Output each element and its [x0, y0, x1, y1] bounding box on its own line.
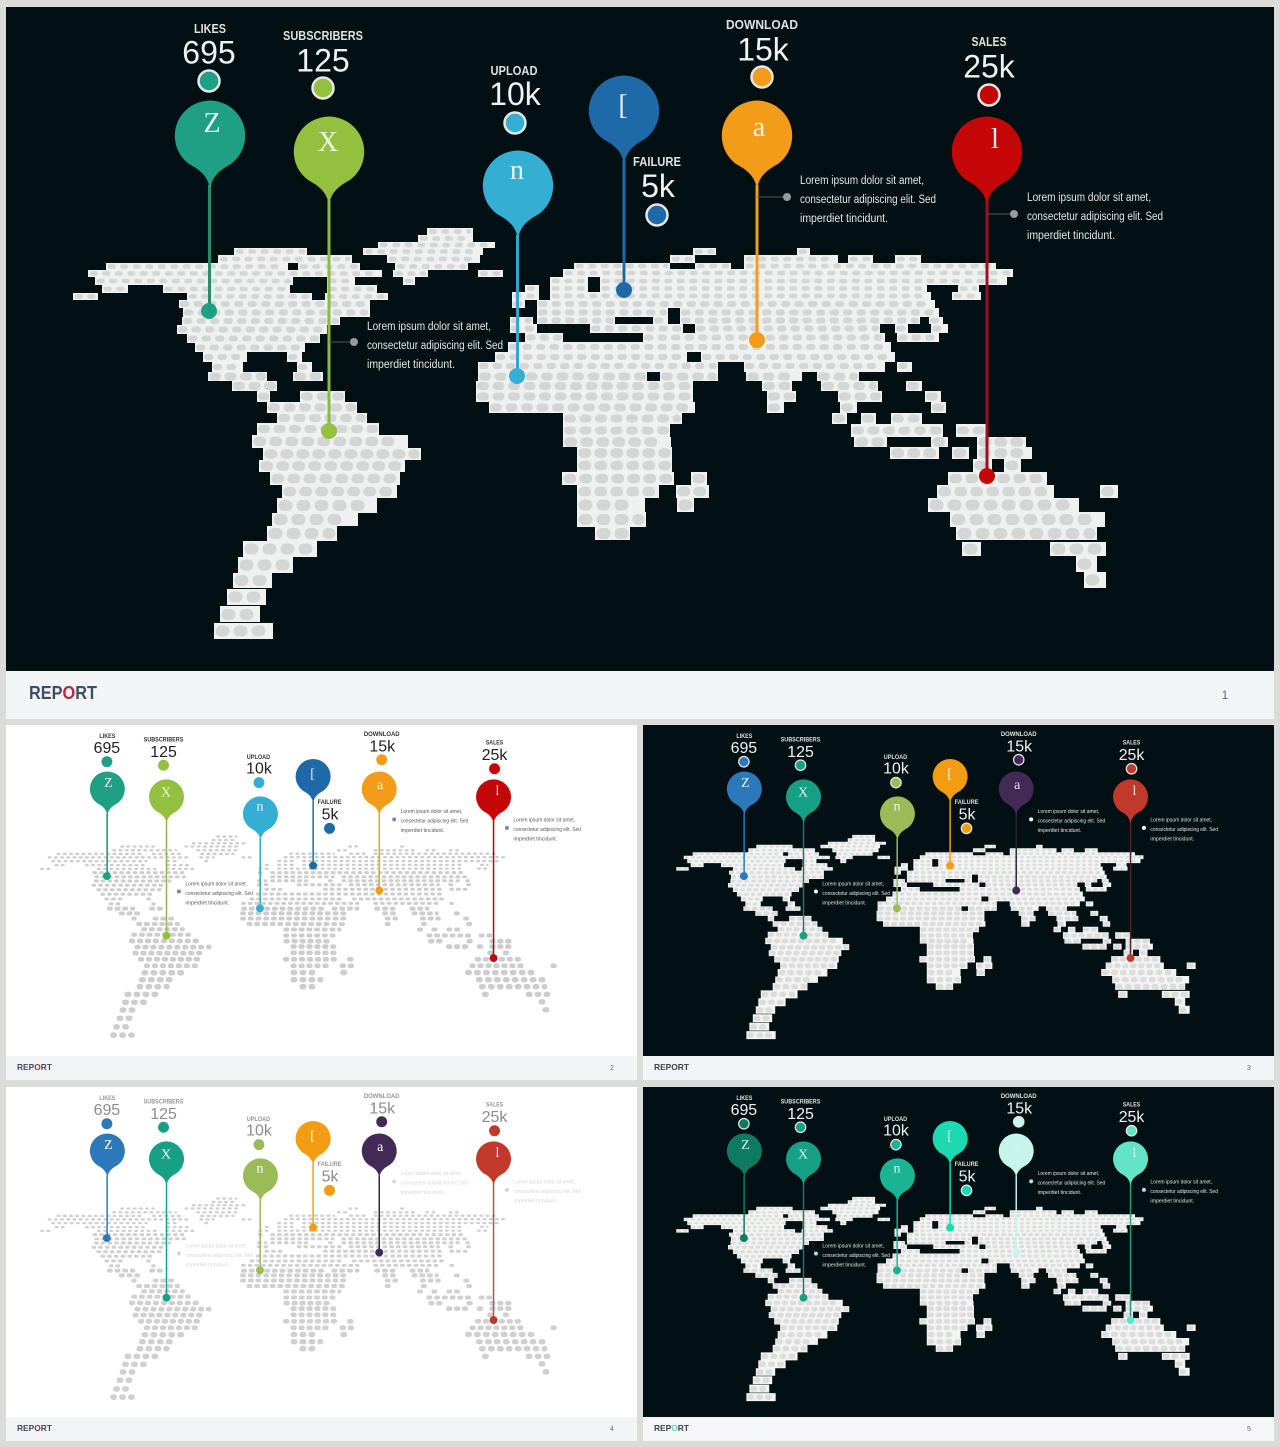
- label: likes 695: LIKES: [99, 1095, 115, 1102]
- pin: l red: l: [496, 1146, 500, 1161]
- label: sales 25k: SALES: [972, 35, 1006, 49]
- pin: l red: [952, 117, 1022, 484]
- pin: bracket orange: [: [310, 1129, 315, 1144]
- world map dots: [41, 1199, 556, 1397]
- label: failure 5k: 5k: [641, 168, 676, 204]
- pin: bracket blue: [: [310, 767, 315, 782]
- callout: americas: [329, 321, 503, 371]
- callout: oceania: Lorem ipsum dolor sit amet,: [513, 817, 575, 823]
- callout: asia: imperdiet tincidunt.: [401, 828, 445, 834]
- label: sales 25k: [1119, 1101, 1144, 1136]
- panel: thumbnail 5 dark slide teal: [643, 1087, 1274, 1417]
- label: upload 10k: [246, 1116, 272, 1150]
- callout: americas: [177, 1244, 253, 1268]
- label: failure 5k: [318, 799, 341, 834]
- label: sales 25k: 25k: [963, 48, 1016, 84]
- callout: americas: Lorem ipsum dolor sit amet,: [185, 1244, 247, 1250]
- callout: americas: Lorem ipsum dolor sit amet,: [822, 1244, 884, 1250]
- pin: Z dark teal: [727, 1133, 762, 1242]
- label: likes 695: 695: [731, 740, 757, 757]
- label: likes 695: LIKES: [736, 1095, 752, 1102]
- callout: asia: [757, 175, 936, 225]
- label: download 15k: 15k: [737, 32, 790, 68]
- label: sales 25k: SALES: [486, 739, 503, 746]
- label: upload 10k: [246, 754, 272, 788]
- label: sales 25k: SALES: [486, 1101, 503, 1108]
- pin: a pale mint: [999, 1133, 1034, 1256]
- footer: thumbnail 3: 3: [1247, 1065, 1251, 1072]
- label: subscribers 125: 125: [787, 1106, 814, 1123]
- label: likes 695: LIKES: [99, 733, 115, 740]
- callout: asia: [392, 1171, 468, 1196]
- pin: bracket blue: [296, 759, 331, 870]
- label: failure 5k: FAILURE: [318, 799, 341, 806]
- callout: asia: consectetur adipiscing elit. Sed: [800, 194, 936, 206]
- pin: Z green: [175, 101, 245, 319]
- pin: Z blue: [90, 1133, 125, 1242]
- label: download 15k: DOWNLOAD: [1001, 731, 1037, 738]
- pin: Z blue: [727, 771, 762, 880]
- footer: main slide: 1: [1222, 688, 1229, 702]
- panel: thumbnail 3 dark slide: [643, 725, 1274, 1056]
- callout: oceania: consectetur adipiscing elit. Sed: [1150, 827, 1218, 833]
- pin: n olive: [880, 796, 915, 912]
- pin: bracket blue: [589, 76, 659, 298]
- label: upload 10k: UPLOAD: [884, 754, 908, 761]
- pin: X lime: X: [318, 127, 338, 158]
- label: likes 695: [94, 733, 120, 767]
- pin: Z blue: Z: [741, 776, 750, 791]
- world map dots: [41, 837, 556, 1035]
- callout: oceania: [505, 1179, 581, 1204]
- callout: oceania: Lorem ipsum dolor sit amet,: [1150, 817, 1212, 823]
- pin: bracket orange: [296, 1121, 331, 1232]
- label: sales 25k: [1119, 739, 1144, 774]
- pin: l red: [476, 779, 511, 962]
- pin: a orange: [722, 101, 792, 348]
- footer: thumbnail 5: [643, 1417, 1274, 1441]
- label: download 15k: 15k: [369, 1101, 395, 1118]
- pin: a purple: a: [377, 1140, 383, 1155]
- label: upload 10k: UPLOAD: [490, 64, 538, 78]
- panel: thumbnail 4 white slide: [6, 1087, 637, 1417]
- label: likes 695: [94, 1095, 120, 1129]
- pin: n olive: n: [893, 799, 900, 814]
- label: upload 10k: 10k: [246, 761, 272, 778]
- callout: oceania: imperdiet tincidunt.: [513, 1198, 558, 1204]
- pin: a orange: a: [377, 778, 383, 793]
- callout: americas: imperdiet tincidunt.: [185, 900, 230, 906]
- label: download 15k: [726, 18, 798, 88]
- label: likes 695: [182, 22, 236, 92]
- callout: oceania: imperdiet tincidunt.: [513, 836, 558, 842]
- footer: thumbnail 2: 2: [610, 1065, 614, 1072]
- callout: asia: imperdiet tincidunt.: [800, 213, 888, 225]
- label: subscribers 125: SUBSCRIBERS: [781, 1098, 820, 1105]
- callout: oceania: consectetur adipiscing elit. Sed: [1150, 1189, 1218, 1195]
- label: likes 695: [731, 1095, 757, 1129]
- callout: oceania: consectetur adipiscing elit. Sed: [513, 1189, 581, 1195]
- callout: oceania: [1142, 817, 1218, 842]
- pin: n green teal: n: [893, 1161, 900, 1176]
- pin: bracket orange: [933, 759, 968, 870]
- callout: americas: imperdiet tincidunt.: [822, 1262, 867, 1268]
- label: subscribers 125: SUBSCRIBERS: [283, 29, 363, 43]
- callout: oceania: consectetur adipiscing elit. Sed: [1027, 211, 1163, 223]
- callout: oceania: [1142, 1179, 1218, 1204]
- pin: X teal: X: [798, 786, 808, 801]
- pin: X teal: X: [161, 1148, 171, 1163]
- footer: thumbnail 3: [643, 1056, 1274, 1080]
- label: download 15k: DOWNLOAD: [1001, 1093, 1037, 1100]
- pin: l red: l: [496, 784, 500, 799]
- callout: americas: imperdiet tincidunt.: [822, 900, 867, 906]
- label: upload 10k: 10k: [883, 761, 909, 778]
- callout: oceania: [505, 817, 581, 842]
- pin: bracket bright teal: [933, 1121, 968, 1232]
- footer: thumbnail 2: [6, 1056, 637, 1080]
- label: likes 695: LIKES: [736, 733, 752, 740]
- label: likes 695: 695: [182, 34, 236, 70]
- callout: americas: consectetur adipiscing elit. Sed: [185, 891, 253, 897]
- footer: thumbnail 4: [6, 1417, 637, 1441]
- footer: thumbnail 4: REPORT: [17, 1423, 53, 1433]
- pin: l mint: [1113, 1141, 1148, 1324]
- label: failure 5k: FAILURE: [318, 1161, 341, 1168]
- callout: americas: consectetur adipiscing elit. Sed: [822, 891, 890, 897]
- pin: n cyan: n: [510, 155, 524, 186]
- callout: asia: imperdiet tincidunt.: [1038, 828, 1082, 834]
- label: likes 695: LIKES: [194, 22, 226, 36]
- pin: Z green: Z: [104, 776, 113, 791]
- callout: americas: Lorem ipsum dolor sit amet,: [367, 321, 491, 333]
- label: download 15k: [1001, 1093, 1037, 1127]
- label: subscribers 125: SUBSCRIBERS: [781, 736, 820, 743]
- label: likes 695: 695: [94, 740, 120, 757]
- label: sales 25k: SALES: [1123, 739, 1140, 746]
- world map: [676, 835, 1196, 1039]
- label: upload 10k: 10k: [246, 1123, 272, 1140]
- pin: n green teal: [880, 1158, 915, 1274]
- label: likes 695: [731, 733, 757, 767]
- label: failure 5k: 5k: [322, 806, 338, 823]
- callout: americas: Lorem ipsum dolor sit amet,: [822, 882, 884, 888]
- pin: X lime: X: [161, 786, 171, 801]
- pin: X lime: [149, 779, 184, 940]
- label: failure 5k: FAILURE: [955, 1161, 978, 1168]
- footer: main slide: [6, 671, 1274, 719]
- callout: oceania: imperdiet tincidunt.: [1027, 230, 1115, 242]
- pin: Z green: [90, 771, 125, 880]
- label: subscribers 125: [144, 736, 183, 771]
- label: sales 25k: [482, 1101, 507, 1136]
- pin: Z blue: Z: [104, 1138, 113, 1153]
- label: upload 10k: [883, 1116, 909, 1150]
- callout: americas: imperdiet tincidunt.: [367, 359, 455, 371]
- pin: l red: l: [991, 124, 999, 155]
- label: subscribers 125: 125: [787, 744, 814, 761]
- panel: thumbnail 2 white slide: [6, 725, 637, 1056]
- label: likes 695: 695: [94, 1102, 120, 1119]
- callout: asia: [1029, 1171, 1105, 1196]
- label: upload 10k: 10k: [883, 1123, 909, 1140]
- pin: a purple: [362, 1133, 397, 1256]
- label: subscribers 125: [283, 29, 363, 98]
- pin: a purple: [999, 771, 1034, 894]
- label: subscribers 125: 125: [150, 1106, 177, 1123]
- world map: [73, 228, 1118, 639]
- callout: asia: consectetur adipiscing elit. Sed: [401, 1180, 468, 1186]
- label: sales 25k: 25k: [482, 1109, 507, 1126]
- panel: main dark slide: [6, 7, 1274, 671]
- pin: n olive: n: [256, 1161, 263, 1176]
- label: download 15k: DOWNLOAD: [364, 731, 400, 738]
- callout: americas: [177, 882, 253, 906]
- pin: n cyan: [243, 796, 278, 912]
- footer: thumbnail 3: REPORT: [654, 1062, 690, 1072]
- callout: americas: Lorem ipsum dolor sit amet,: [185, 882, 247, 888]
- pin: n cyan: [483, 151, 553, 384]
- callout: americas: [814, 882, 890, 906]
- callout: oceania: consectetur adipiscing elit. Sed: [513, 827, 581, 833]
- label: download 15k: [1001, 731, 1037, 765]
- callout: oceania: imperdiet tincidunt.: [1150, 836, 1195, 842]
- label: subscribers 125: SUBSCRIBERS: [144, 1098, 183, 1105]
- callout: asia: Lorem ipsum dolor sit amet,: [401, 1171, 463, 1177]
- label: subscribers 125: [144, 1098, 183, 1133]
- label: sales 25k: SALES: [1123, 1101, 1140, 1108]
- label: likes 695: 695: [731, 1102, 757, 1119]
- pin: n cyan: n: [256, 799, 263, 814]
- footer: thumbnail 2: REPORT: [17, 1062, 53, 1072]
- label: download 15k: 15k: [369, 739, 395, 756]
- callout: americas: consectetur adipiscing elit. Sed: [822, 1253, 890, 1259]
- label: failure 5k: [633, 155, 681, 226]
- label: download 15k: 15k: [1006, 1101, 1032, 1118]
- callout: oceania: Lorem ipsum dolor sit amet,: [1027, 192, 1151, 204]
- label: subscribers 125: [781, 1098, 820, 1132]
- callout: americas: consectetur adipiscing elit. Sed: [185, 1253, 253, 1259]
- pin: bracket orange: [: [947, 767, 952, 782]
- label: sales 25k: [963, 35, 1016, 106]
- label: download 15k: [364, 731, 400, 765]
- callout: asia: Lorem ipsum dolor sit amet,: [1038, 809, 1100, 815]
- label: upload 10k: UPLOAD: [247, 1116, 271, 1123]
- label: sales 25k: 25k: [482, 747, 507, 764]
- callout: americas: consectetur adipiscing elit. Sed: [367, 340, 503, 352]
- pin: a purple: a: [1014, 778, 1020, 793]
- callout: asia: Lorem ipsum dolor sit amet,: [800, 175, 924, 187]
- pin: Z green: Z: [203, 108, 221, 139]
- callout: asia: Lorem ipsum dolor sit amet,: [401, 809, 463, 815]
- callout: oceania: Lorem ipsum dolor sit amet,: [1150, 1179, 1212, 1185]
- pin: l mint: l: [1133, 1146, 1137, 1161]
- pin: Z dark teal: Z: [741, 1138, 750, 1153]
- pin: a pale mint: a: [1014, 1140, 1020, 1155]
- label: upload 10k: UPLOAD: [884, 1116, 908, 1123]
- label: failure 5k: FAILURE: [955, 799, 978, 806]
- label: failure 5k: 5k: [959, 806, 975, 823]
- label: upload 10k: [489, 64, 542, 134]
- label: upload 10k: [883, 754, 909, 788]
- pin: l red: [476, 1141, 511, 1324]
- label: download 15k: 15k: [1006, 739, 1032, 756]
- label: failure 5k: [955, 799, 978, 834]
- pin: a orange: a: [753, 112, 766, 143]
- pin: X teal: [149, 1141, 184, 1302]
- label: failure 5k: [318, 1161, 341, 1196]
- label: failure 5k: 5k: [959, 1168, 975, 1185]
- label: subscribers 125: 125: [150, 744, 177, 761]
- label: sales 25k: [482, 739, 507, 774]
- label: failure 5k: [955, 1161, 978, 1196]
- callout: americas: [814, 1244, 890, 1268]
- label: download 15k: DOWNLOAD: [364, 1093, 400, 1100]
- label: failure 5k: 5k: [322, 1168, 338, 1185]
- label: sales 25k: 25k: [1119, 1109, 1144, 1126]
- pin: X teal: [786, 779, 821, 940]
- label: failure 5k: FAILURE: [633, 155, 681, 169]
- callout: oceania: [987, 192, 1163, 242]
- callout: americas: imperdiet tincidunt.: [185, 1262, 230, 1268]
- footer: main slide: REPORT: [29, 683, 97, 703]
- callout: oceania: Lorem ipsum dolor sit amet,: [513, 1179, 575, 1185]
- callout: asia: imperdiet tincidunt.: [401, 1190, 445, 1196]
- pin: n olive: [243, 1158, 278, 1274]
- callout: asia: [392, 809, 468, 834]
- label: upload 10k: 10k: [489, 76, 542, 112]
- callout: asia: Lorem ipsum dolor sit amet,: [1038, 1171, 1100, 1177]
- callout: oceania: imperdiet tincidunt.: [1150, 1198, 1195, 1204]
- label: subscribers 125: 125: [296, 42, 350, 78]
- footer: thumbnail 4: 4: [610, 1426, 614, 1433]
- label: download 15k: [364, 1093, 400, 1127]
- pin: X teal: X: [798, 1148, 808, 1163]
- callout: asia: [1029, 809, 1105, 834]
- pin: bracket bright teal: [: [947, 1129, 952, 1144]
- label: sales 25k: 25k: [1119, 747, 1144, 764]
- label: upload 10k: UPLOAD: [247, 754, 271, 761]
- callout: asia: consectetur adipiscing elit. Sed: [401, 818, 468, 824]
- label: subscribers 125: SUBSCRIBERS: [144, 736, 183, 743]
- pin: bracket blue: [: [618, 90, 628, 121]
- callout: asia: consectetur adipiscing elit. Sed: [1038, 818, 1105, 824]
- callout: asia: imperdiet tincidunt.: [1038, 1190, 1082, 1196]
- callout: asia: consectetur adipiscing elit. Sed: [1038, 1180, 1105, 1186]
- label: subscribers 125: [781, 736, 820, 770]
- label: download 15k: DOWNLOAD: [726, 18, 798, 32]
- world map: [676, 1197, 1196, 1401]
- pin: l red: [1113, 779, 1148, 962]
- footer: thumbnail 5: REPORT: [654, 1423, 690, 1433]
- pin: X teal: [786, 1141, 821, 1302]
- footer: thumbnail 5: 5: [1247, 1426, 1251, 1433]
- pin: a orange: [362, 771, 397, 894]
- pin: l red: l: [1133, 784, 1137, 799]
- pin: X lime: [294, 117, 364, 439]
